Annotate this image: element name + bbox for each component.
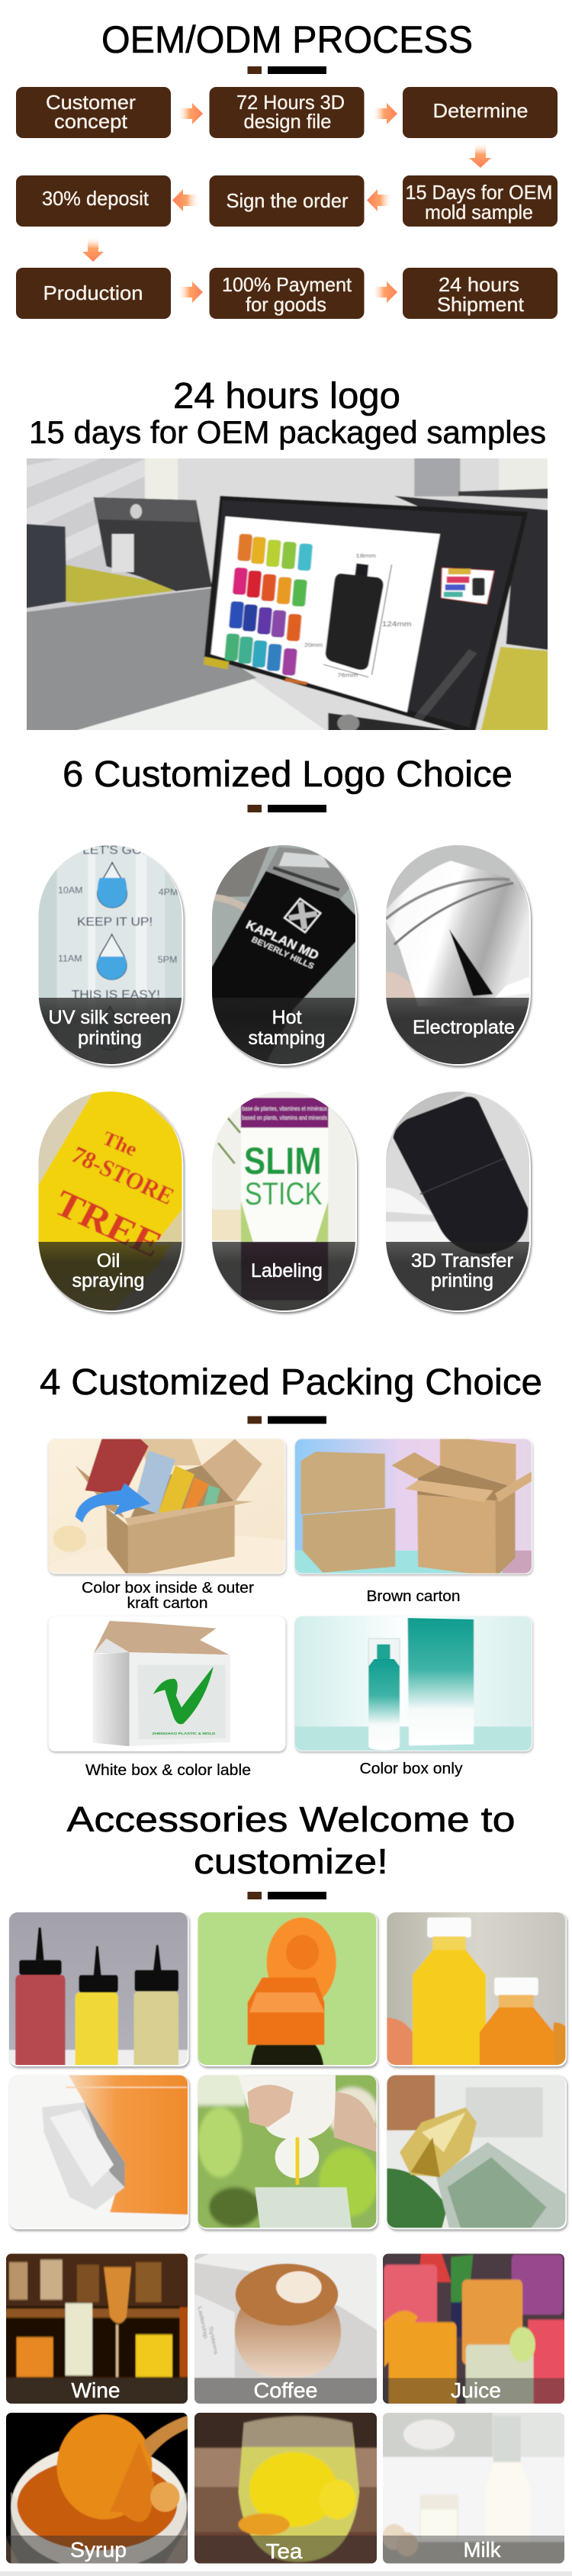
photo: Juice: Juice xyxy=(451,2378,501,2402)
label: Color box inside and outer kraft carton: kraft carton xyxy=(127,1595,207,1612)
pill: Labeling xyxy=(209,1089,359,1314)
photo: Juice xyxy=(383,2253,564,2404)
photo: Coffee xyxy=(191,2249,381,2409)
pill: Hot stamping: stamping xyxy=(249,1028,325,1049)
step: 72 Hours 3D design file xyxy=(209,87,365,138)
pill: UV silk screen printing: printing xyxy=(78,1028,142,1049)
card: squeeze bottle over glass xyxy=(198,2075,380,2232)
step: Production xyxy=(16,268,171,319)
pill: UV silk screen printing xyxy=(35,842,185,1068)
step: 24 hours Shipment: Shipment xyxy=(437,293,525,316)
step: 30% deposit: 30% deposit xyxy=(42,187,149,210)
arrow xyxy=(172,189,198,211)
card: colour box and kraft carton xyxy=(45,1436,289,1578)
photo: office monitor with bottle design: 20mm xyxy=(304,642,323,648)
pill: Labeling: STICK xyxy=(245,1176,323,1212)
heading: Accessories Welcome to customize!: customize! xyxy=(194,1841,388,1881)
step: Sign the order: Sign the order xyxy=(226,189,349,212)
label: Color box inside and outer kraft carton: Color box inside & outer xyxy=(82,1580,254,1597)
photo: Syrup: Syrup xyxy=(70,2538,127,2562)
card: white box and colour label xyxy=(49,1616,286,1753)
photo: Milk: Milk xyxy=(464,2538,501,2562)
step: Customer concept xyxy=(16,87,171,138)
pill: Hot stamping: KAPLAN MD xyxy=(243,918,321,963)
step: Production: Production xyxy=(43,281,143,304)
label: Color box only: Color box only xyxy=(360,1761,462,1777)
arrow xyxy=(82,237,104,262)
pill: Labeling: base de plantes, vitamines et minéraux xyxy=(242,1105,327,1112)
label: Brown carton: Brown carton xyxy=(366,1588,461,1605)
heading: Accessories Welcome to customize! xyxy=(67,1799,516,1881)
pill: Labeling: Labeling xyxy=(251,1260,323,1282)
photo: Wine: Wine xyxy=(72,2378,121,2402)
heading: 24 hours logo: 24 hours logo xyxy=(173,376,400,416)
photo: office monitor with bottle design: 76mm xyxy=(337,672,358,678)
pill: Oil spraying: Oil xyxy=(97,1250,120,1272)
card: orange flip cap xyxy=(194,1908,381,2073)
heading divider xyxy=(247,805,326,812)
photo: Wine xyxy=(6,2253,188,2404)
pill: UV silk screen printing: 10AM xyxy=(58,885,83,896)
pill: Electroplate xyxy=(382,842,533,1068)
photo: Coffee: Coffee xyxy=(253,2378,317,2402)
label: Color box inside and outer kraft carton xyxy=(82,1580,254,1612)
arrow xyxy=(178,103,203,124)
step: 100% Payment for goods xyxy=(209,268,365,319)
arrow xyxy=(373,103,397,124)
step: 15 Days for OEM mold sample: mold sample xyxy=(425,201,533,224)
step: 30% deposit xyxy=(16,175,171,227)
photo: Tea xyxy=(191,2408,381,2569)
photo: Syrup xyxy=(6,2413,188,2563)
pill: Hot stamping: BEVERLY HILLS xyxy=(250,935,316,971)
pill: Oil spraying: spraying xyxy=(72,1270,145,1291)
step: 15 Days for OEM mold sample xyxy=(403,175,558,227)
heading: 6 Customized Logo Choice: 6 Customized Logo Choice xyxy=(63,754,513,795)
bottom strip xyxy=(0,2571,572,2576)
card: juice bottles xyxy=(384,1908,570,2073)
pill: Labeling: based on plants, vitamins and minerals xyxy=(242,1114,327,1121)
card: white box and colour label: ZHENGHAO PLASTIC & MOLD xyxy=(153,1732,215,1736)
step: Determine: Determine xyxy=(433,99,528,122)
pill: Oil spraying: TREE xyxy=(47,1182,169,1265)
pill: Oil spraying xyxy=(35,1089,186,1314)
pill: UV silk screen printing: UV silk screen xyxy=(49,1007,171,1028)
pill: UV silk screen printing: 4PM xyxy=(159,887,178,897)
pill: UV silk screen printing: LET'S GO! xyxy=(82,843,146,857)
heading divider xyxy=(247,1892,326,1899)
label: White box and color lable: White box & color lable xyxy=(85,1762,251,1779)
step: 100% Payment for goods: 100% Payment xyxy=(222,273,352,296)
pill: 3D Transfer printing: 3D Transfer xyxy=(411,1250,513,1272)
pill: UV silk screen printing: THIS IS EASY! xyxy=(72,988,160,1002)
photo: office monitor with bottle design: 124mm xyxy=(382,621,411,629)
pill: Hot stamping: Hot xyxy=(272,1007,302,1028)
step: Sign the order xyxy=(209,175,365,227)
card: brown carton xyxy=(291,1436,535,1578)
pill: Oil spraying: The xyxy=(99,1127,141,1160)
pill: Hot stamping xyxy=(209,842,359,1068)
pill: UV silk screen printing: 11AM xyxy=(58,954,82,964)
heading divider xyxy=(247,66,326,74)
pill: UV silk screen printing: 5PM xyxy=(158,954,177,965)
step: 100% Payment for goods: for goods xyxy=(246,293,326,316)
heading divider xyxy=(247,1416,326,1423)
heading: Accessories Welcome to customize!: Accessories Welcome to xyxy=(67,1799,516,1839)
photo: Milk xyxy=(383,2413,564,2563)
heading: 4 Customized Packing Choice: 4 Customized Packing Choice xyxy=(40,1362,542,1403)
arrow xyxy=(367,189,391,211)
card: flat orange bottle with silver cap xyxy=(5,2070,192,2235)
card: glass bottle with gold cap xyxy=(384,2070,570,2235)
step: 24 hours Shipment xyxy=(403,268,558,319)
photo: office monitor with bottle design: 18mm xyxy=(355,552,376,559)
step: Customer concept: concept xyxy=(54,110,128,133)
section: OEM/ODM process xyxy=(16,18,558,319)
pill: 3D Transfer printing: printing xyxy=(431,1270,493,1291)
pill: Oil spraying: 78-STORE xyxy=(67,1142,178,1211)
step: 72 Hours 3D design file: 72 Hours 3D xyxy=(236,91,345,114)
step: Customer concept: Customer xyxy=(46,91,136,114)
photo: Coffee: Systems xyxy=(207,2325,220,2356)
arrow xyxy=(469,143,491,168)
step: 24 hours Shipment: 24 hours xyxy=(439,273,519,296)
photo: Tea: Tea xyxy=(265,2539,303,2563)
pill: Labeling: SLIM xyxy=(244,1140,322,1182)
card: squeeze bottles xyxy=(5,1908,192,2073)
step: 15 Days for OEM mold sample: 15 Days for OEM xyxy=(406,181,552,204)
photo: Coffee: Ladership xyxy=(197,2305,209,2340)
step: Determine xyxy=(403,87,558,138)
photo: office monitor with bottle design xyxy=(22,455,554,734)
heading: 15 days for OEM packaged samples: 15 days for OEM packaged samples xyxy=(29,414,546,450)
arrow xyxy=(178,281,203,303)
title: OEM/ODM PROCESS: OEM/ODM PROCESS xyxy=(101,18,473,61)
arrow xyxy=(373,281,397,303)
card: colour box only xyxy=(291,1613,535,1754)
pill: 3D Transfer printing xyxy=(382,1089,533,1314)
pill: UV silk screen printing: KEEP IT UP! xyxy=(77,915,153,929)
pill: Electroplate: Electroplate xyxy=(413,1017,515,1038)
step: 72 Hours 3D design file: design file xyxy=(244,110,331,133)
